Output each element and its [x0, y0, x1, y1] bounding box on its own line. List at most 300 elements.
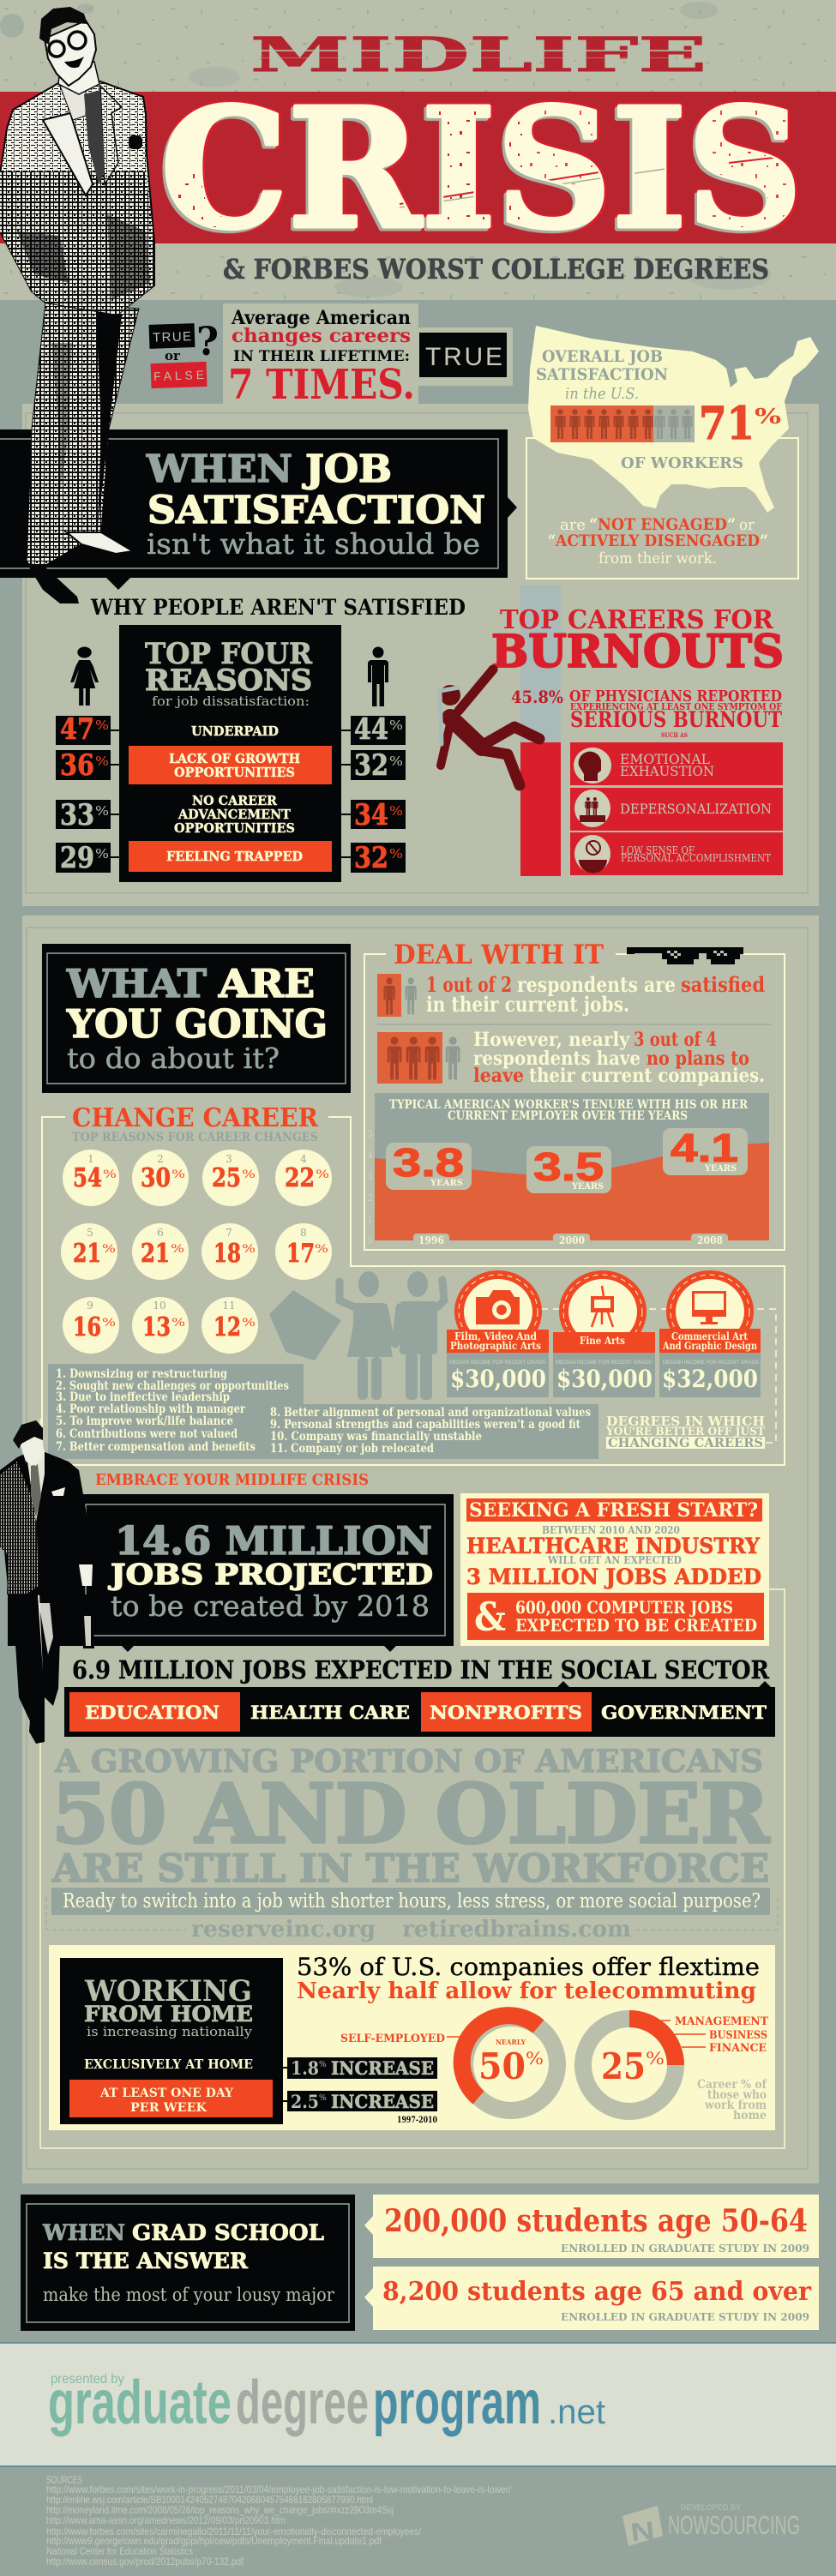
panel: job satisfaction	[22, 404, 819, 906]
text: between: BETWEEN 2010 AND 2020	[542, 1524, 680, 1536]
stat: 45.8 percent: 45.8%	[511, 687, 563, 707]
chart title: TYPICAL AMERICAN WORKER'S TENURE WITH HIS OR HER	[389, 1098, 748, 1112]
stat: 2.5 percent	[287, 2091, 437, 2112]
heading: working: WORKING	[84, 1974, 252, 2009]
reason circles: 11	[222, 1300, 236, 1312]
heading: 14.6 million: 14.6 MILLION	[115, 1518, 432, 1564]
list: reasons 1-7: 6. Contributions were not valued	[56, 1427, 238, 1441]
banner: what are you going	[42, 944, 351, 1093]
callout: 7 times	[223, 303, 418, 409]
arrow down	[106, 578, 130, 590]
panel: career change and jobs	[22, 916, 819, 2183]
reason: lack of growth	[129, 746, 332, 784]
dashed connector	[541, 1309, 776, 1443]
link: reserveinc: reserveinc.org	[191, 1917, 376, 1943]
y axis: 4	[367, 1150, 373, 1161]
heading: burnouts: BURNOUTS	[491, 626, 784, 678]
line: 7 times: 7 TIMES.	[228, 361, 415, 409]
heading: should be: isn't what it should be	[147, 527, 480, 561]
sources: http://online.wsj.com/article/SB10001424052748704206804575468162805877990.html	[46, 2494, 373, 2506]
sources: SOURCES	[46, 2474, 82, 2486]
men percentages: %	[389, 718, 403, 733]
tab: government: GOVERNMENT	[601, 1702, 767, 1723]
text: exclusively at home: EXCLUSIVELY AT HOME	[84, 2057, 253, 2072]
symptom: emotional exhaustion	[570, 742, 783, 785]
symptom: low sense of accomplishment	[570, 832, 783, 875]
reason circles: 8	[300, 1227, 307, 1239]
list: reasons 8-11: 8. Better alignment of personal and organizational values	[270, 1406, 591, 1420]
title: midlife: MIDLIFE	[250, 27, 707, 82]
stat: 2.5 percent: 2.5	[291, 2091, 319, 2112]
developed by: DEVELOPED BY	[681, 2503, 741, 2512]
tab: education: EDUCATION	[85, 1702, 220, 1723]
panel: top four reasons	[119, 625, 341, 882]
text: 1 out of 2: respondents are	[517, 972, 676, 997]
text: flextime: 53% of U.S. companies offer flextime	[297, 1953, 760, 1981]
men percentages: %	[389, 803, 403, 819]
lapel	[43, 113, 93, 195]
title: crisis: CRISIS	[158, 75, 800, 268]
reason circles: 1	[87, 1153, 94, 1165]
sources: http://www.census.gov/prod/2012pubs/p70-132.pdf	[46, 2555, 244, 2567]
subheading: TOP REASONS FOR CAREER CHANGES	[72, 1131, 318, 1144]
shirt and tie	[27, 1450, 45, 1522]
box: at least one day	[69, 2080, 273, 2117]
banner: 14.6 million jobs	[8, 1494, 454, 1652]
degree: commercial art and graphic design: Commercial Art	[671, 1330, 748, 1342]
icon: monitor	[692, 1291, 726, 1324]
heading: from home: FROM HOME	[84, 2002, 253, 2027]
line: still in workforce: ARE STILL IN THE WORKFORCE	[51, 1846, 769, 1891]
donut: career share: %	[646, 2048, 665, 2069]
reason: underpaid: UNDERPAID	[191, 724, 279, 739]
icon: 1 of 2 people	[377, 974, 417, 1017]
reason circles: %	[102, 1317, 116, 1330]
text: 1 out of 2: in their current jobs.	[426, 992, 629, 1017]
text: of workers: OF WORKERS	[621, 454, 743, 472]
answer: true: TRUE	[425, 343, 502, 371]
text: healthcare: HEALTHCARE INDUSTRY	[466, 1534, 761, 1558]
map outline box	[526, 438, 798, 579]
banner: when grad school	[21, 2195, 355, 2331]
stat: 1.8 percent	[283, 2057, 437, 2101]
reason circles: 2	[157, 1153, 164, 1165]
symptom: emotional exhaustion: EMOTIONAL	[620, 751, 710, 767]
head	[45, 21, 96, 86]
value: 3.8 years	[386, 1140, 472, 1190]
men percentages: 32	[354, 748, 388, 783]
line: in their lifetime: IN THEIR LIFETIME:	[233, 348, 410, 365]
stat: 8,200 students: ENROLLED IN GRADUATE STUDY IN 2009	[561, 2311, 809, 2323]
x axis years: 2008	[697, 1234, 723, 1246]
heading: jobs projected: JOBS PROJECTED	[108, 1558, 433, 1591]
text: lousy major: make the most of your lousy major	[43, 2285, 335, 2305]
date range: 1997-2010	[397, 2116, 437, 2125]
text: 3 out of 4: 3 out of 4	[634, 1029, 717, 1051]
panel: deal with it	[364, 940, 785, 1250]
text: increasing: is increasing nationally	[87, 2024, 253, 2039]
callout: ready to switch	[46, 1888, 778, 1943]
neck	[58, 62, 99, 94]
heading: embrace: EMBRACE YOUR MIDLIFE CRISIS	[95, 1471, 369, 1489]
value: 3.5 years	[526, 1144, 611, 1193]
reason circles: 6	[157, 1227, 164, 1239]
reason circles: %	[242, 1317, 256, 1330]
shoes	[27, 563, 79, 603]
head	[19, 1433, 45, 1466]
reason circles: 22	[285, 1163, 315, 1193]
stat: 2.5 percent: %	[319, 2094, 327, 2103]
arrows	[122, 1646, 396, 1652]
reason: no career advancement: ADVANCEMENT	[177, 807, 292, 822]
degree: fine arts: MEDIAN INCOME FOR RECENT GRADS	[556, 1360, 652, 1366]
heading: satisfaction: SATISFACTION	[147, 489, 485, 532]
reason circles: 12	[214, 1312, 241, 1342]
reason: feeling trapped: FEELING TRAPPED	[166, 849, 303, 864]
heading: social sector: 6.9 MILLION JOBS EXPECTED IN THE SOCIAL SECTOR	[72, 1655, 770, 1684]
chart title	[389, 1098, 748, 1123]
caption: degrees	[605, 1414, 765, 1450]
reason: feeling trapped	[129, 841, 332, 872]
panel: seeking a fresh start	[460, 1493, 769, 1646]
women percentages: %	[95, 846, 109, 862]
note: career percent: work from	[704, 2099, 767, 2112]
reason circles: %	[103, 1168, 117, 1181]
people row 71 percent	[550, 405, 695, 442]
title: crisis: CRISIS	[160, 74, 803, 267]
donut: self-employed: %	[526, 2048, 544, 2069]
reason circles: 21	[73, 1239, 101, 1269]
symptom: emotional exhaustion: EXHAUSTION	[620, 763, 714, 779]
reason: lack of growth: LACK OF GROWTH	[169, 751, 300, 766]
box: at least one day: AT LEAST ONE DAY	[99, 2087, 234, 2100]
value: 3.8 years: YEARS	[430, 1179, 463, 1188]
x axis years	[413, 1234, 728, 1246]
list: reasons 1-7: 5. To improve work/life balance	[56, 1414, 233, 1428]
degree: fine arts	[553, 1270, 655, 1397]
list: reasons 8-11: 10. Company was financially unstable	[270, 1430, 482, 1444]
x axis years: 2000	[559, 1234, 585, 1246]
reason circles: 54	[73, 1163, 102, 1193]
map of us	[528, 326, 819, 513]
callout: computer jobs	[467, 1593, 764, 1640]
us map and job satisfaction stat	[526, 326, 819, 579]
title: crisis	[162, 100, 797, 235]
panel: top careers for burnouts	[440, 585, 784, 876]
men percentages: 34	[354, 798, 388, 832]
logo mark	[622, 2506, 663, 2547]
frame	[42, 1117, 785, 1465]
value: nearly 50 percent: NEARLY	[496, 2038, 526, 2046]
developed by nowsourcing	[622, 2503, 800, 2547]
y axis: 5	[367, 1128, 373, 1139]
sources: National Center for Education Statistics	[46, 2545, 193, 2557]
women percentages: 47	[60, 712, 94, 747]
donut: career share	[583, 2015, 768, 2111]
text: 3 out of 4: their current companies.	[529, 1065, 765, 1087]
title: crisis: CRISIS	[160, 73, 803, 266]
women percentages: 36	[60, 748, 94, 783]
sector tabs	[64, 1681, 775, 1737]
text: telecommuting: Nearly half allow for telecommuting	[297, 1979, 756, 2004]
stat: 8,200 students: 8,200 students age 65 and over	[382, 2277, 812, 2307]
illustration: man in plaid suit	[0, 7, 154, 603]
women percentages: %	[95, 754, 109, 769]
symptom: depersonalization: DEPERSONALIZATION	[620, 801, 772, 817]
stat: 71 percent: 71	[699, 398, 755, 450]
reason circles: %	[315, 1243, 328, 1256]
y axis: 0	[367, 1235, 373, 1246]
line: average american: Average American	[231, 307, 411, 329]
men percentages: 44	[354, 712, 388, 747]
heading: what: WHAT	[66, 961, 207, 1006]
stat: 1.8 percent: 1.8	[291, 2057, 319, 2079]
value: 25 percent: 25	[601, 2045, 646, 2087]
caption: degrees: CHANGING CAREERS	[608, 1435, 763, 1450]
text: not engaged: or	[739, 516, 755, 534]
illustration: man with briefcase	[0, 1420, 94, 1744]
reason: no career advancement	[174, 793, 295, 836]
value: 4.1 years: 4.1	[671, 1126, 738, 1170]
stat: 8,200 students	[364, 2267, 819, 2330]
icon: camera	[476, 1290, 520, 1324]
text: 1 out of 2: 1 out of 2	[426, 972, 512, 997]
list: reasons 8-11: 9. Personal strengths and capabilities weren't a good fit	[270, 1418, 580, 1432]
heading: reasons: REASONS	[145, 664, 312, 698]
panel: change career	[42, 1103, 785, 1465]
text: actively disengaged: ACTIVELY DISENGAGED	[555, 531, 760, 550]
text: actively disengaged: “	[548, 531, 556, 550]
symptom: low sense of accomplishment: PERSONAL ACCOMPLISHMENT	[621, 852, 771, 864]
line: changes careers: changes careers	[232, 325, 411, 347]
sources: http://www9.georgetown.edu/grad/gppi/hpi/cew/pdfs/Unemployment.Final.update1.pdf	[46, 2535, 382, 2547]
donut: self-employed	[340, 2015, 557, 2111]
reason circles: 21	[141, 1239, 170, 1269]
stat: 71 percent: %	[755, 404, 781, 429]
men percentages: %	[389, 846, 403, 862]
answer: true	[418, 327, 513, 386]
labels: careers: BUSINESS	[709, 2029, 767, 2042]
reason circles: 25	[212, 1163, 241, 1193]
list: reasons 1-7: 1. Downsizing or restructuring	[56, 1367, 227, 1381]
degree: fine arts: $30,000	[556, 1365, 653, 1393]
note: career percent: Career % of	[697, 2078, 767, 2092]
reason circles: 30	[141, 1163, 171, 1193]
reason: lack of growth: OPPORTUNITIES	[174, 765, 295, 780]
reason circles: %	[242, 1168, 256, 1181]
note: career percent: home	[733, 2109, 767, 2123]
reason circles: 7	[226, 1227, 232, 1239]
heading: is the answer: IS THE ANSWER	[43, 2249, 248, 2273]
heading: top careers for: TOP CAREERS FOR	[500, 605, 774, 635]
list: reasons 8-11	[270, 1406, 591, 1456]
jacket	[0, 81, 154, 315]
text: physicians: SUCH AS	[661, 731, 688, 739]
heading: to do about it: to do about it?	[67, 1042, 280, 1075]
badge: false: FALSE	[153, 368, 204, 383]
frame	[364, 954, 785, 1250]
text: 3 out of 4: leave	[473, 1065, 524, 1087]
text: 1 out of 2: satisfied	[681, 972, 765, 997]
symptom: low sense of accomplishment: LOW SENSE OF	[621, 844, 695, 856]
frame: jobs section	[40, 1419, 785, 2148]
text: from their work: from their work.	[598, 549, 717, 567]
value: 3.5 years: 3.5	[533, 1144, 604, 1189]
text: actively disengaged: ”	[760, 531, 768, 550]
stat: 1.8 percent: INCREASE	[331, 2057, 434, 2079]
women percentages	[56, 712, 119, 875]
text: not engaged: are	[560, 516, 586, 534]
heading: SEEKING A FRESH START?	[469, 1499, 758, 1522]
stat: 2.5 percent: INCREASE	[331, 2091, 434, 2112]
sources	[46, 2474, 512, 2567]
subtitle: & FORBES WORST COLLEGE DEGREES	[223, 253, 769, 285]
stat: 200,000 students: ENROLLED IN GRADUATE STUDY IN 2009	[561, 2243, 809, 2255]
y axis: 1	[367, 1214, 373, 1225]
text: 3 out of 4	[473, 1029, 765, 1087]
note: career percent	[697, 2078, 767, 2123]
text: 3 out of 4: However, nearly	[473, 1029, 630, 1051]
shoe	[29, 1719, 45, 1744]
icon: man	[368, 646, 388, 706]
value: 4.1 years	[663, 1126, 748, 1175]
panel: working from home	[49, 1945, 775, 2130]
logo: graduate: graduate	[48, 2369, 232, 2437]
y axis: 2	[367, 1192, 373, 1204]
degree: film video and photographic arts	[447, 1270, 549, 1397]
heading: job: JOB	[302, 447, 392, 491]
callout: computer jobs: 600,000 COMPUTER JOBS	[515, 1597, 733, 1618]
caption: degrees: DEGREES IN WHICH	[606, 1414, 765, 1429]
degree: film video and photographic arts: MEDIAN INCOME FOR RECENT GRADS	[449, 1360, 545, 1366]
reason circles: 16	[73, 1312, 101, 1342]
logo: degree: degree	[236, 2369, 369, 2437]
badge: true: TRUE	[153, 329, 191, 345]
glasses	[49, 41, 64, 57]
heading: change career: CHANGE CAREER	[72, 1103, 319, 1133]
women percentages: 29	[60, 841, 94, 875]
men percentages	[341, 712, 406, 875]
icon: papers	[269, 1290, 341, 1360]
heading: are: ARE	[218, 961, 315, 1006]
black box	[60, 1958, 283, 2124]
reason circles: 5	[87, 1227, 93, 1239]
degree: commercial art and graphic design: $32,000	[662, 1365, 758, 1393]
degree: film video and photographic arts: $30,000	[450, 1365, 546, 1393]
hand and briefcase	[79, 1564, 93, 1586]
reason: no career advancement: NO CAREER	[192, 793, 278, 808]
tab: nonprofits: NONPROFITS	[430, 1702, 582, 1723]
symptom: depersonalization	[570, 788, 783, 831]
degree: commercial art and graphic design: And Graphic Design	[662, 1340, 757, 1352]
degree: fine arts: Fine Arts	[580, 1335, 625, 1347]
reason circles: 18	[214, 1239, 241, 1269]
icon: woman	[70, 646, 99, 706]
sources: http://moneyland.time.com/2008/05/28/top_reasons_why_we_change_jobs/#ixzz29O3m4Svj	[46, 2504, 394, 2516]
icon: pixel sunglasses	[627, 947, 743, 964]
list: reasons 8-11: 11. Company or job relocated	[270, 1442, 434, 1456]
text: will get: WILL GET AN EXPECTED	[547, 1554, 682, 1566]
reason circles	[61, 1150, 332, 1354]
sources: http://www.forbes.com/sites/carminegallo/2011/11/11/your-emotionally-disconnected-employees/	[46, 2525, 422, 2537]
reason circles: 4	[300, 1153, 307, 1165]
degree: commercial art and graphic design: MEDIAN INCOME FOR RECENT GRADS	[663, 1360, 759, 1366]
logo mark: N	[629, 2517, 656, 2547]
reason circles: %	[171, 1168, 185, 1181]
callout: computer jobs: EXPECTED TO BE CREATED	[515, 1615, 757, 1636]
reason circles: 9	[87, 1300, 93, 1312]
list: reasons 1-7	[48, 1364, 598, 1459]
heading: grad school: GRAD SCHOOL	[132, 2220, 324, 2245]
tab: health care: HEALTH CARE	[250, 1702, 410, 1723]
heading: why people: WHY PEOPLE AREN'T SATISFIED	[90, 595, 466, 620]
labels: careers	[661, 2015, 768, 2055]
line: a growing portion: A GROWING PORTION OF AMERICANS	[54, 1744, 763, 1780]
degree: film video and photographic arts: Photographic Arts	[450, 1340, 541, 1352]
value: 3.5 years: YEARS	[571, 1182, 604, 1192]
shirt and tie	[60, 86, 86, 120]
icon: easel	[591, 1286, 614, 1327]
true or false quiz	[149, 318, 219, 388]
text: 1 out of 2	[426, 972, 765, 1017]
text: in the us: in the U.S.	[565, 385, 639, 403]
women percentages: %	[95, 718, 109, 733]
sources: http://www.forbes.com/sites/work-in-progress/2011/03/04/employee-job-satisfaction-is-low-motivation-to-leave-is-lower/	[46, 2483, 512, 2495]
chart: tenure over the years	[367, 1093, 769, 1246]
box: at least one day: PER WEEK	[130, 2101, 207, 2115]
reason circles: 17	[286, 1239, 315, 1269]
reason circles: %	[171, 1243, 184, 1256]
or: or	[165, 348, 181, 363]
reason circles: %	[102, 1243, 116, 1256]
banner: when job satisfaction	[0, 429, 517, 590]
legs	[12, 1577, 73, 1725]
list: reasons 1-7: 4. Poor relationship with manager	[56, 1402, 246, 1416]
heading: 50 and older	[51, 1744, 770, 1891]
labels: careers: FINANCE	[709, 2042, 767, 2055]
reason: no career advancement: OPPORTUNITIES	[174, 820, 295, 836]
stat: 200,000 students	[364, 2195, 819, 2258]
jacket	[0, 1449, 93, 1596]
donut: self-employed: 50	[478, 2045, 526, 2087]
heading: to be created: to be created by 2018	[111, 1589, 430, 1623]
labels: careers: MANAGEMENT	[675, 2015, 768, 2028]
legs	[27, 303, 139, 567]
line: 50 and older: 50 AND OLDER	[51, 1767, 770, 1862]
caption: degrees: YOU'RE BETTER OFF JUST	[605, 1426, 765, 1438]
icon: climbing figure	[440, 670, 539, 785]
list: reasons 1-7: 3. Due to ineffective leadership	[56, 1390, 230, 1404]
footer band	[0, 2343, 836, 2466]
icon: 3 of 4 people	[377, 1032, 460, 1084]
women percentages: 33	[60, 798, 94, 832]
reason circles: 10	[153, 1300, 166, 1312]
men percentages: 32	[354, 841, 388, 875]
degree: film video and photographic arts: Film, Video And	[454, 1330, 538, 1342]
question mark: ?	[196, 318, 219, 364]
heading: deal with it: DEAL WITH IT	[394, 940, 604, 970]
men percentages: %	[389, 754, 403, 769]
degree: commercial art and graphic design	[659, 1270, 761, 1397]
reason circles: %	[242, 1243, 256, 1256]
note: career percent: those who	[707, 2088, 767, 2102]
heading: you going: YOU GOING	[66, 1001, 328, 1047]
red title band	[0, 92, 836, 243]
sources: http://www.ama-assn.org/amednews/2012/09/03/prl20903.htm	[46, 2514, 286, 2526]
heading: top four: TOP FOUR	[145, 637, 313, 671]
text: satisfaction: SATISFACTION	[536, 365, 668, 384]
logo: net: .net	[548, 2393, 605, 2431]
